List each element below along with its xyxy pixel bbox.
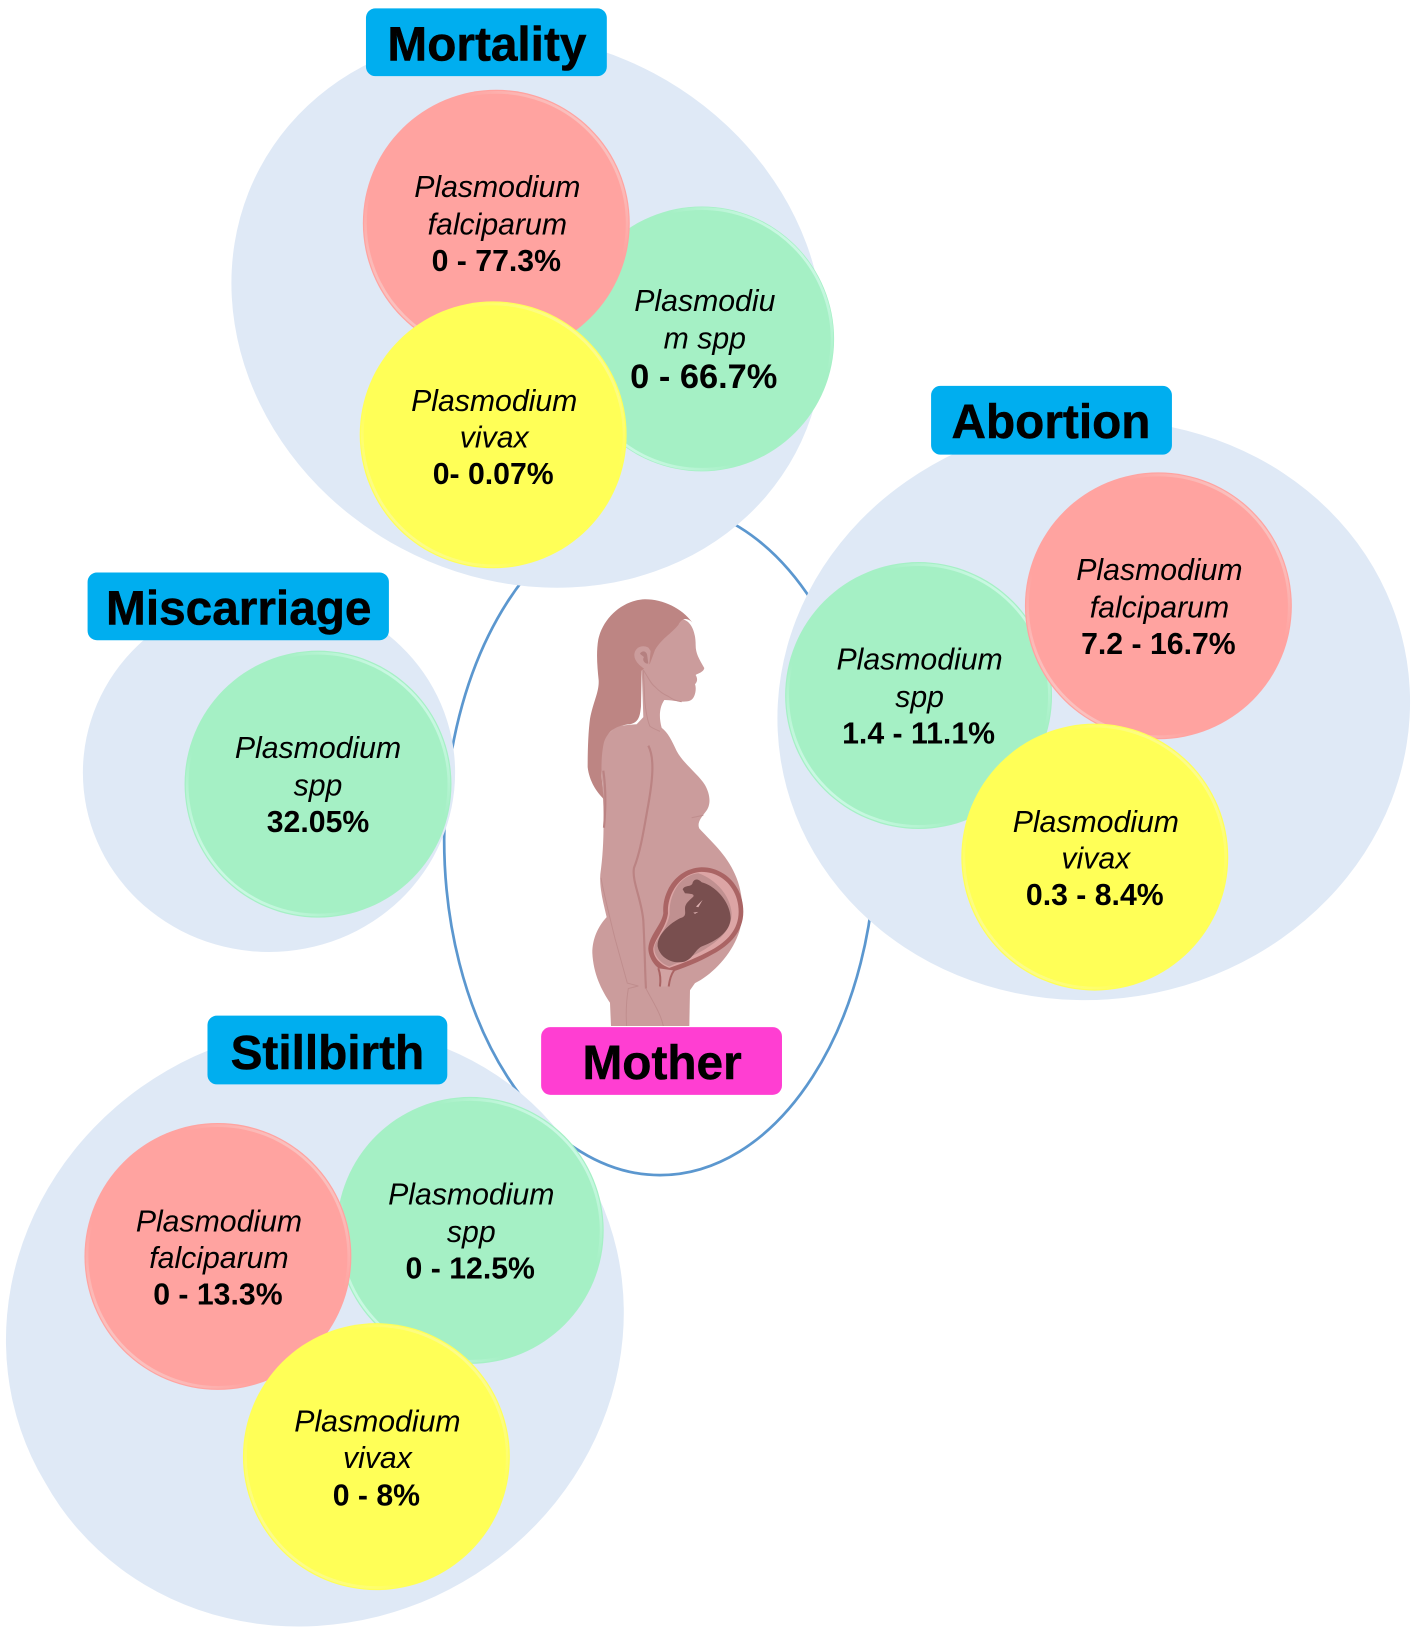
panel: Mortality (133, 0, 922, 691)
Plasmodium vivax circle (243, 1323, 510, 1590)
Plasmodium spp circle: 0 - 66.7% (630, 358, 777, 396)
Plasmodium vivax circle: vivax (1061, 843, 1131, 876)
Plasmodium spp circle: m spp (664, 322, 746, 355)
Plasmodium spp circle: 0 - 12.5% (406, 1252, 535, 1285)
Plasmodium spp circle (185, 651, 451, 918)
panel: Mother label (541, 1027, 782, 1095)
Plasmodium vivax circle: 0.3 - 8.4% (1026, 879, 1164, 912)
Miscarriage background ellipse (83, 593, 455, 952)
Plasmodium spp circle: spp (447, 1216, 496, 1249)
Stillbirth background shape (6, 1026, 624, 1626)
arm and body contour lines (601, 670, 703, 1026)
Plasmodium vivax circle: vivax (343, 1442, 413, 1475)
Stillbirth label (207, 1016, 447, 1084)
mother outline ellipse (444, 504, 876, 1175)
Mortality background ellipse (133, 0, 922, 691)
Plasmodium spp circle: Plasmodium (836, 643, 1003, 676)
Abortion background ellipse (735, 375, 1418, 1045)
panel: Miscarriage (83, 572, 455, 952)
Plasmodium vivax circle (360, 301, 627, 568)
Plasmodium spp circle: 1.4 - 11.1% (842, 717, 995, 750)
Plasmodium spp circle: spp (895, 681, 944, 714)
Plasmodium vivax circle (961, 724, 1228, 991)
Plasmodium spp circle (785, 562, 1052, 829)
Miscarriage label (88, 572, 389, 640)
Plasmodium falciparum circle: Plasmodium (136, 1205, 302, 1238)
Abortion label (931, 386, 1172, 455)
Plasmodium falciparum circle (363, 90, 630, 357)
panel: Stillbirth (6, 1016, 624, 1626)
Plasmodium falciparum circle (84, 1123, 351, 1390)
Plasmodium vivax circle: Plasmodium (1013, 806, 1179, 839)
Plasmodium spp circle: Plasmodiu (634, 285, 776, 318)
Plasmodium spp circle (337, 1097, 604, 1364)
Plasmodium vivax circle: 0- 0.07% (433, 458, 554, 491)
panel: Abortion (735, 375, 1418, 1045)
Abortion label: Abortion (952, 396, 1150, 449)
Plasmodium falciparum circle: 0 - 77.3% (432, 245, 561, 278)
Plasmodium spp circle (569, 207, 834, 471)
hair (588, 599, 692, 799)
Miscarriage label: Miscarriage (106, 583, 371, 636)
Stillbirth label: Stillbirth (231, 1027, 424, 1080)
Plasmodium falciparum circle: falciparum (428, 209, 567, 242)
Mortality label: Mortality (387, 19, 587, 72)
Plasmodium falciparum circle: falciparum (149, 1242, 289, 1275)
Plasmodium vivax circle: Plasmodium (294, 1406, 461, 1439)
Plasmodium falciparum circle: falciparum (1090, 591, 1229, 624)
amniotic sac (654, 873, 732, 967)
Plasmodium falciparum circle: Plasmodium (1076, 554, 1243, 587)
Plasmodium spp circle: Plasmodium (235, 732, 401, 765)
panel: Mother label: Mother (583, 1037, 742, 1090)
Mortality label (366, 8, 607, 76)
uterus and fetus (648, 867, 743, 987)
fetus silhouette (658, 879, 731, 962)
Plasmodium falciparum circle: 7.2 - 16.7% (1081, 628, 1236, 661)
Plasmodium spp circle: Plasmodium (388, 1178, 554, 1211)
Plasmodium vivax circle: vivax (460, 421, 530, 454)
icon: pregnant mother figure (588, 599, 743, 1026)
cervix (658, 968, 674, 987)
ear (634, 646, 651, 670)
uterine wall (648, 867, 743, 973)
Plasmodium falciparum circle: 0 - 13.3% (153, 1278, 283, 1311)
Plasmodium falciparum circle: Plasmodium (414, 171, 580, 204)
Plasmodium falciparum circle (1025, 472, 1292, 739)
Plasmodium spp circle: 32.05% (267, 806, 369, 839)
Plasmodium spp circle: spp (294, 770, 342, 803)
Plasmodium vivax circle: Plasmodium (411, 385, 577, 418)
Plasmodium vivax circle: 0 - 8% (333, 1480, 420, 1513)
placenta (653, 872, 739, 968)
